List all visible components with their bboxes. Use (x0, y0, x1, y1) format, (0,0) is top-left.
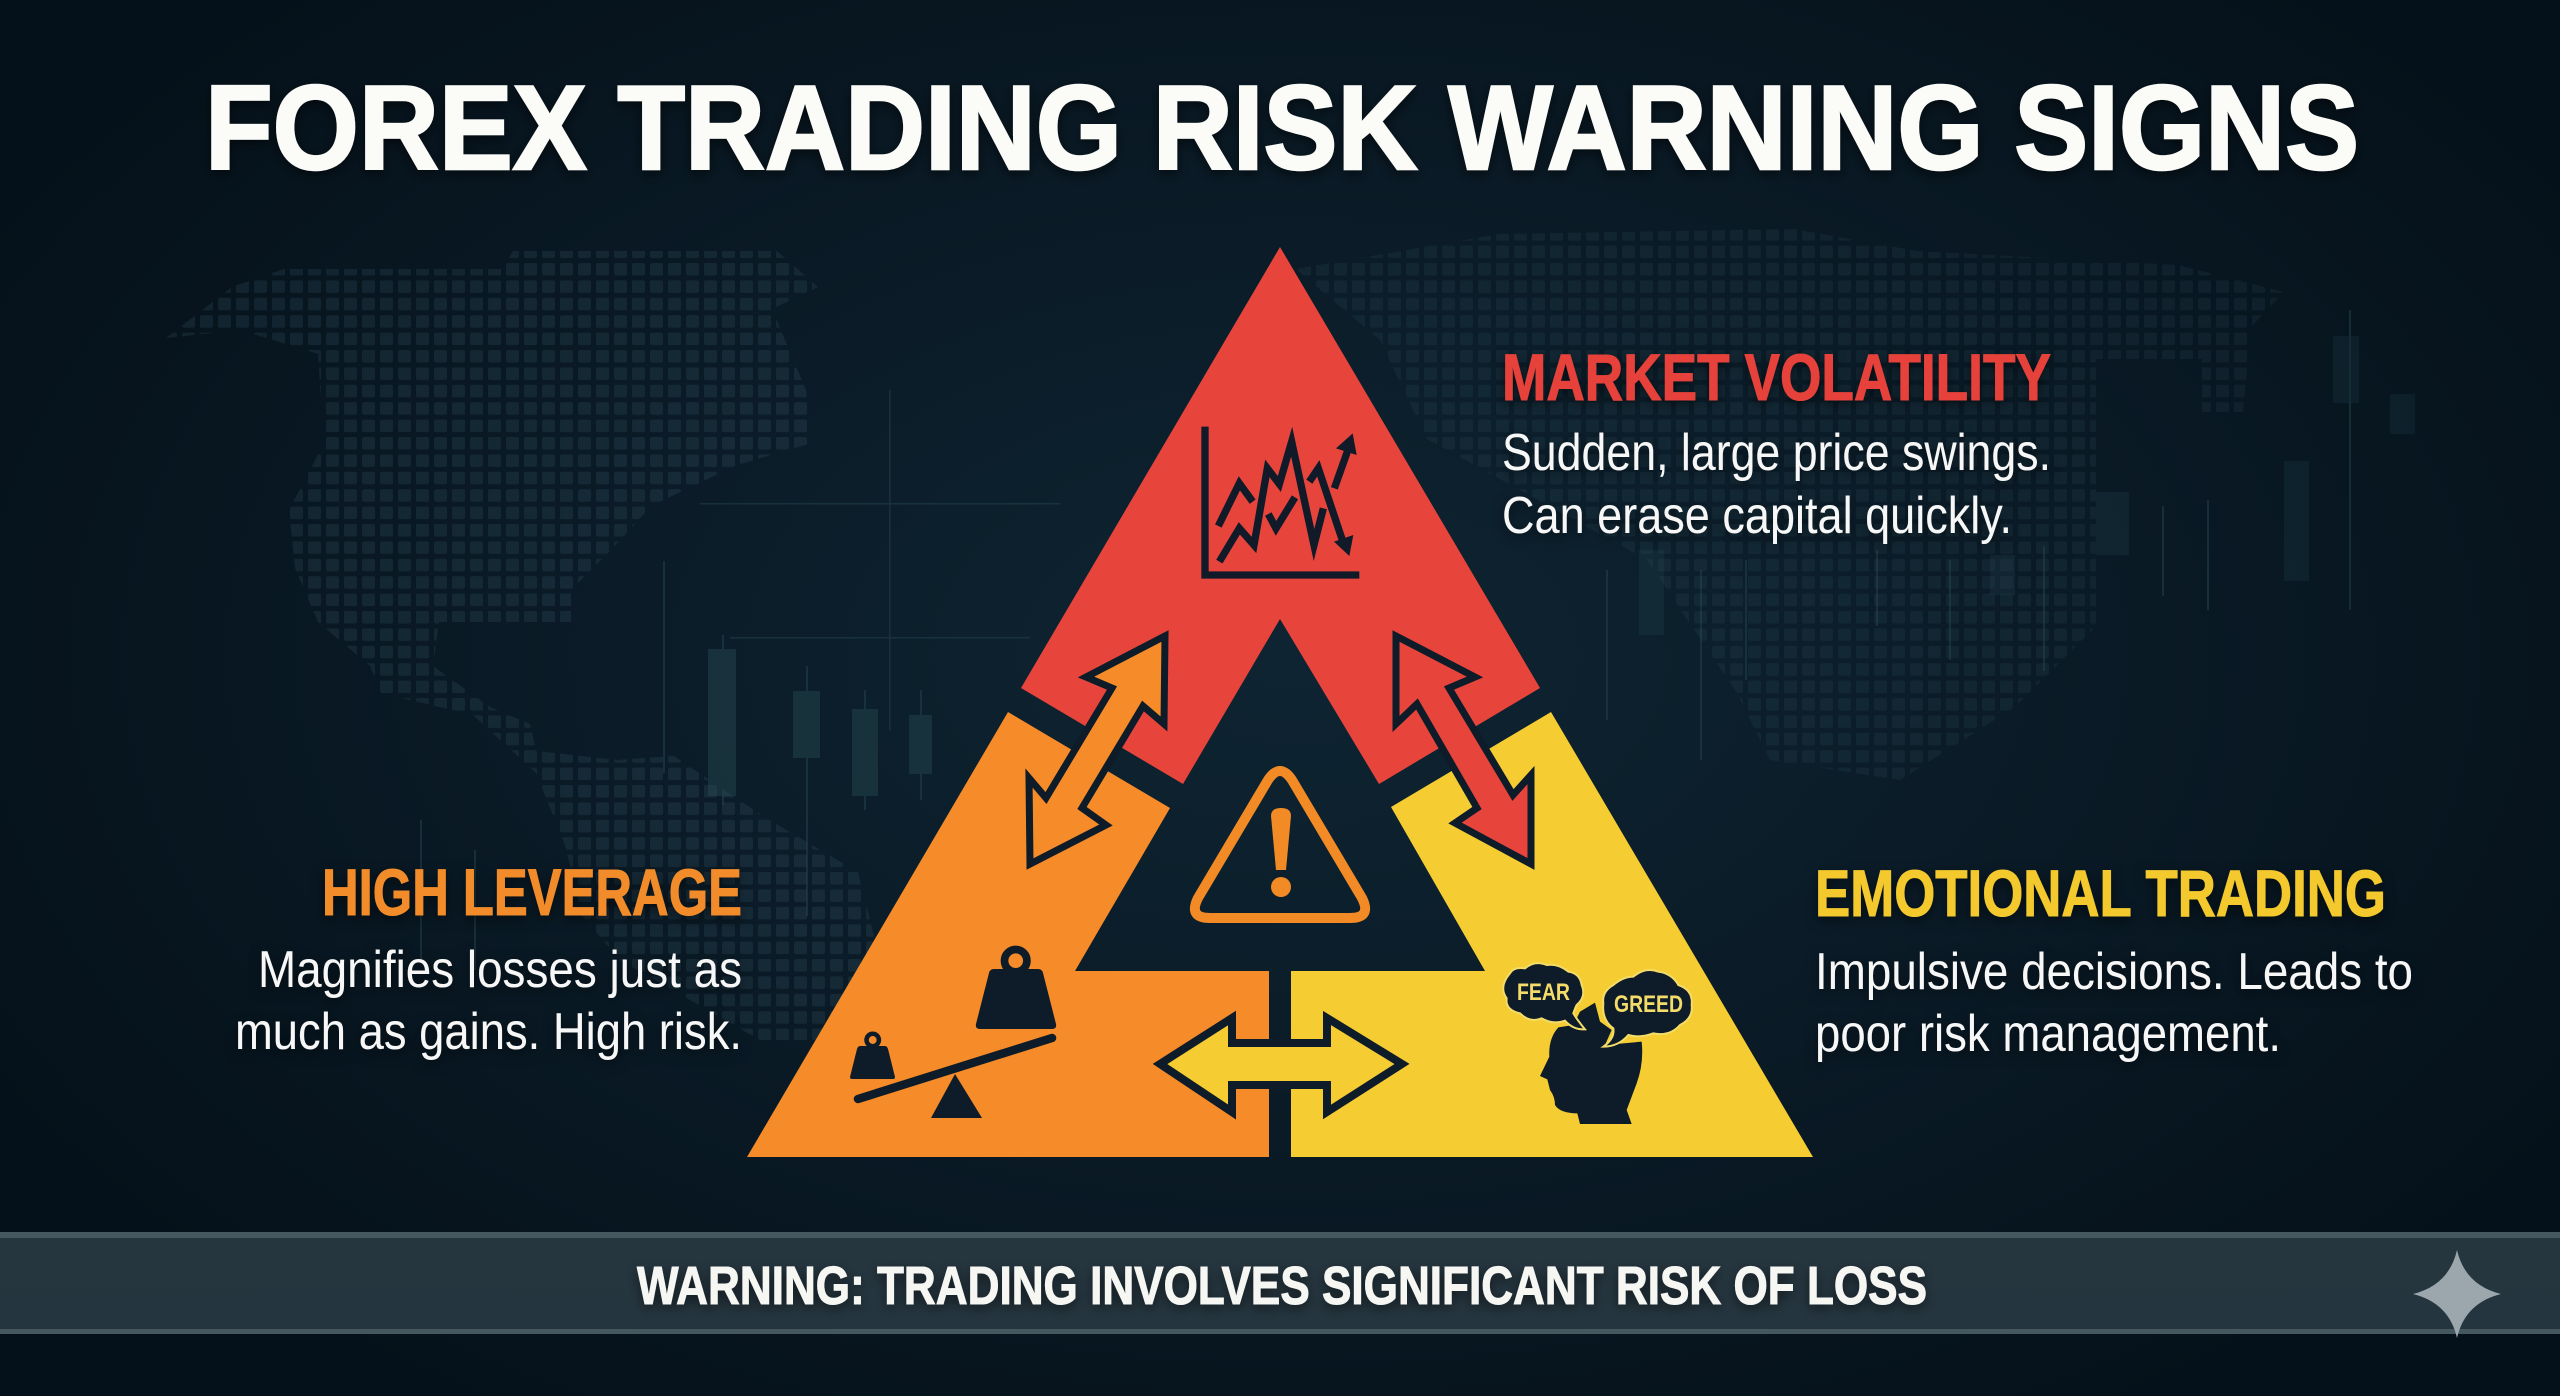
text block: emotional trading: Impulsive decisions. Leads to (1815, 943, 2413, 1001)
icon: leverage weights on seesaw (850, 950, 1056, 1118)
segment: market volatility (red) (1021, 247, 1540, 784)
label: fear: FEAR (1517, 979, 1570, 1006)
text block: high leverage: much as gains. High risk. (235, 1003, 742, 1061)
text block: emotional trading (1815, 856, 2413, 1063)
background: dotted world map (150, 220, 2300, 1060)
icon: head with fear and greed bubbles (1503, 963, 1692, 1124)
label: greed: GREED (1614, 991, 1683, 1018)
segment: high leverage (orange) (747, 712, 1269, 1157)
segment: emotional trading (yellow) (1291, 712, 1813, 1157)
warning banner (0, 1232, 2560, 1334)
arrow: red double arrow (1396, 636, 1531, 864)
icon: volatility chart (1205, 427, 1359, 575)
text block: emotional trading: poor risk management. (1815, 1005, 2281, 1063)
text block: market volatility (1502, 340, 2051, 545)
arrow: orange double arrow (1029, 636, 1165, 864)
arrow: yellow double arrow (1160, 1018, 1402, 1112)
text block: emotional trading: EMOTIONAL TRADING (1815, 856, 2386, 930)
text block: market volatility: Sudden, large price swings. (1502, 424, 2051, 482)
text block: high leverage (235, 855, 742, 1061)
title: FOREX TRADING RISK WARNING SIGNS (205, 61, 2359, 195)
text block: market volatility: Can erase capital quickly. (1502, 487, 2012, 545)
text block: high leverage: Magnifies losses just as (258, 941, 742, 999)
icon: warning sign (1195, 771, 1365, 918)
text block: high leverage: HIGH LEVERAGE (322, 855, 742, 929)
background: faint candlestick chart (420, 310, 2415, 970)
banner text: WARNING: TRADING INVOLVES SIGNIFICANT RISK OF LOSS (637, 1256, 1927, 1316)
text block: market volatility: MARKET VOLATILITY (1502, 340, 2051, 414)
panel: risk triangle (747, 247, 1813, 1157)
icon: sparkle star (2413, 1250, 2501, 1338)
